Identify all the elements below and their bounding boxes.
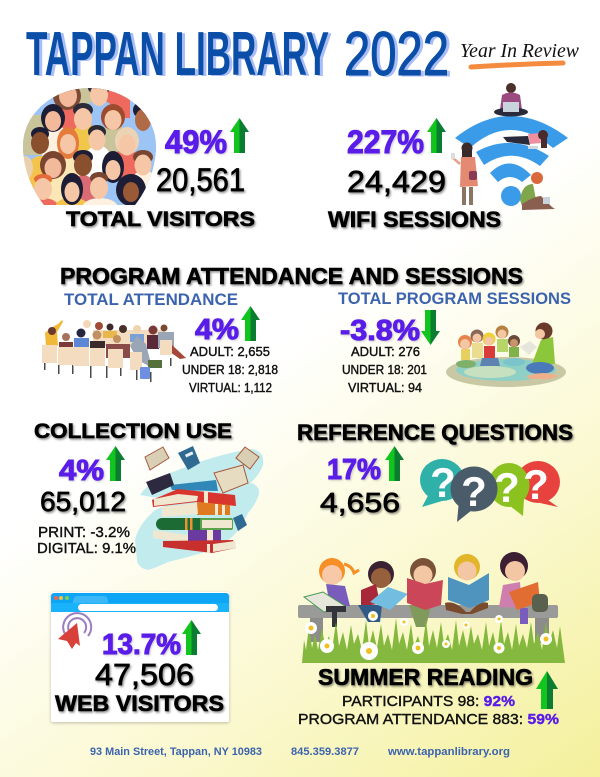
heading: reference questions: REFERENCE QUESTIONS [297,420,573,445]
collection breakdown: PRINT: -3.2% [38,525,130,541]
stat: web change [102,620,201,661]
stat: collection change: 4% [59,455,104,487]
title: 2022 [344,20,449,89]
stat: web number: 47,506 [95,657,194,692]
stat: sessions change [340,310,440,347]
footer: contact details [90,746,510,758]
stat: reference change [327,446,404,486]
title: 2022 [347,21,452,90]
arrow up [427,118,446,153]
illustration: question mark speech bubbles: ? [430,459,456,506]
heading: program attendance and sessions: PROGRAM ATTENDANCE AND SESSIONS [60,263,523,289]
arrow up [385,446,404,481]
illustration: question mark speech bubbles: ? [461,468,487,515]
arrow down [421,310,440,345]
arrow up [230,118,249,153]
stat: visitors number: 20,561 [156,162,245,198]
illustration: wifi symbol with people [451,83,568,210]
stat: attendance change: 4% [195,314,239,346]
attendance breakdown: ADULT: 2,655 [190,345,270,359]
stat: wifi number: 24,429 [347,164,446,199]
collection breakdown: DIGITAL: 9.1% [37,541,136,557]
title: TAPPAN LIBRARY [26,20,329,89]
arrow up [182,620,201,655]
sessions breakdown: UNDER 18: 201 [342,363,427,377]
attendance breakdown [182,345,278,395]
collection breakdown [37,525,136,557]
sessions breakdown: ADULT: 276 [351,345,420,359]
sessions breakdown [342,345,427,395]
arrow up [536,671,558,709]
icon: cursor with target rings [58,613,91,649]
label: web visitors: WEB VISITORS [55,691,224,716]
footer: contact details: www.tappanlibrary.org [387,746,510,758]
footer: contact details: 845.359.3877 [291,746,359,758]
attendance breakdown: VIRTUAL: 1,112 [189,381,272,395]
stat: collection number: 65,012 [40,486,126,517]
heading: summer reading: SUMMER READING [318,664,533,690]
stat: attendance change [195,306,260,346]
panel: web visitors browser window [51,592,229,722]
summer reading participants: PARTICIPANTS 98: 92% [342,693,515,710]
stat: visitors change: 49% [165,124,227,160]
attendance breakdown: UNDER 18: 2,818 [182,363,278,377]
illustration: audience on chairs [42,320,186,382]
browser toolbar [51,593,229,612]
stat: collection change [59,446,125,487]
illustration: question mark speech bubbles: ? [494,464,520,511]
illustration: question mark speech bubbles: ? [523,461,549,508]
illustration: question mark speech bubbles [420,459,560,522]
heading: collection use: COLLECTION USE [34,420,232,443]
stat: reference change: 17% [327,454,381,486]
sessions breakdown: VIRTUAL: 94 [348,381,422,395]
stat: web change: 13.7% [102,629,181,661]
subtitle: year in review: Year In Review [460,40,580,62]
arrow up [106,446,125,481]
stat: wifi change: 227% [347,124,424,160]
stat: visitors change [165,118,249,160]
title: TAPPAN LIBRARY [29,21,332,90]
illustration: stack of books [135,446,263,570]
arrow up [241,306,260,341]
stat: reference number: 4,656 [320,487,400,518]
illustration: teacher reading to children [446,322,566,387]
illustration: children reading on a bench in grass [298,552,565,663]
subheading: total attendance: TOTAL ATTENDANCE [64,290,238,309]
summer reading program attendance: PROGRAM ATTENDANCE 883: 59% [298,711,559,728]
stat: sessions change: -3.8% [340,315,420,347]
illustration: crowd of people [23,88,156,205]
label: wifi sessions: WIFI SESSIONS [328,207,501,232]
subheading: total program sessions: TOTAL PROGRAM SESSIONS [338,289,571,308]
footer: contact details: 93 Main Street, Tappan, NY 10983 [90,746,262,758]
label: total visitors: TOTAL VISITORS [66,208,255,231]
